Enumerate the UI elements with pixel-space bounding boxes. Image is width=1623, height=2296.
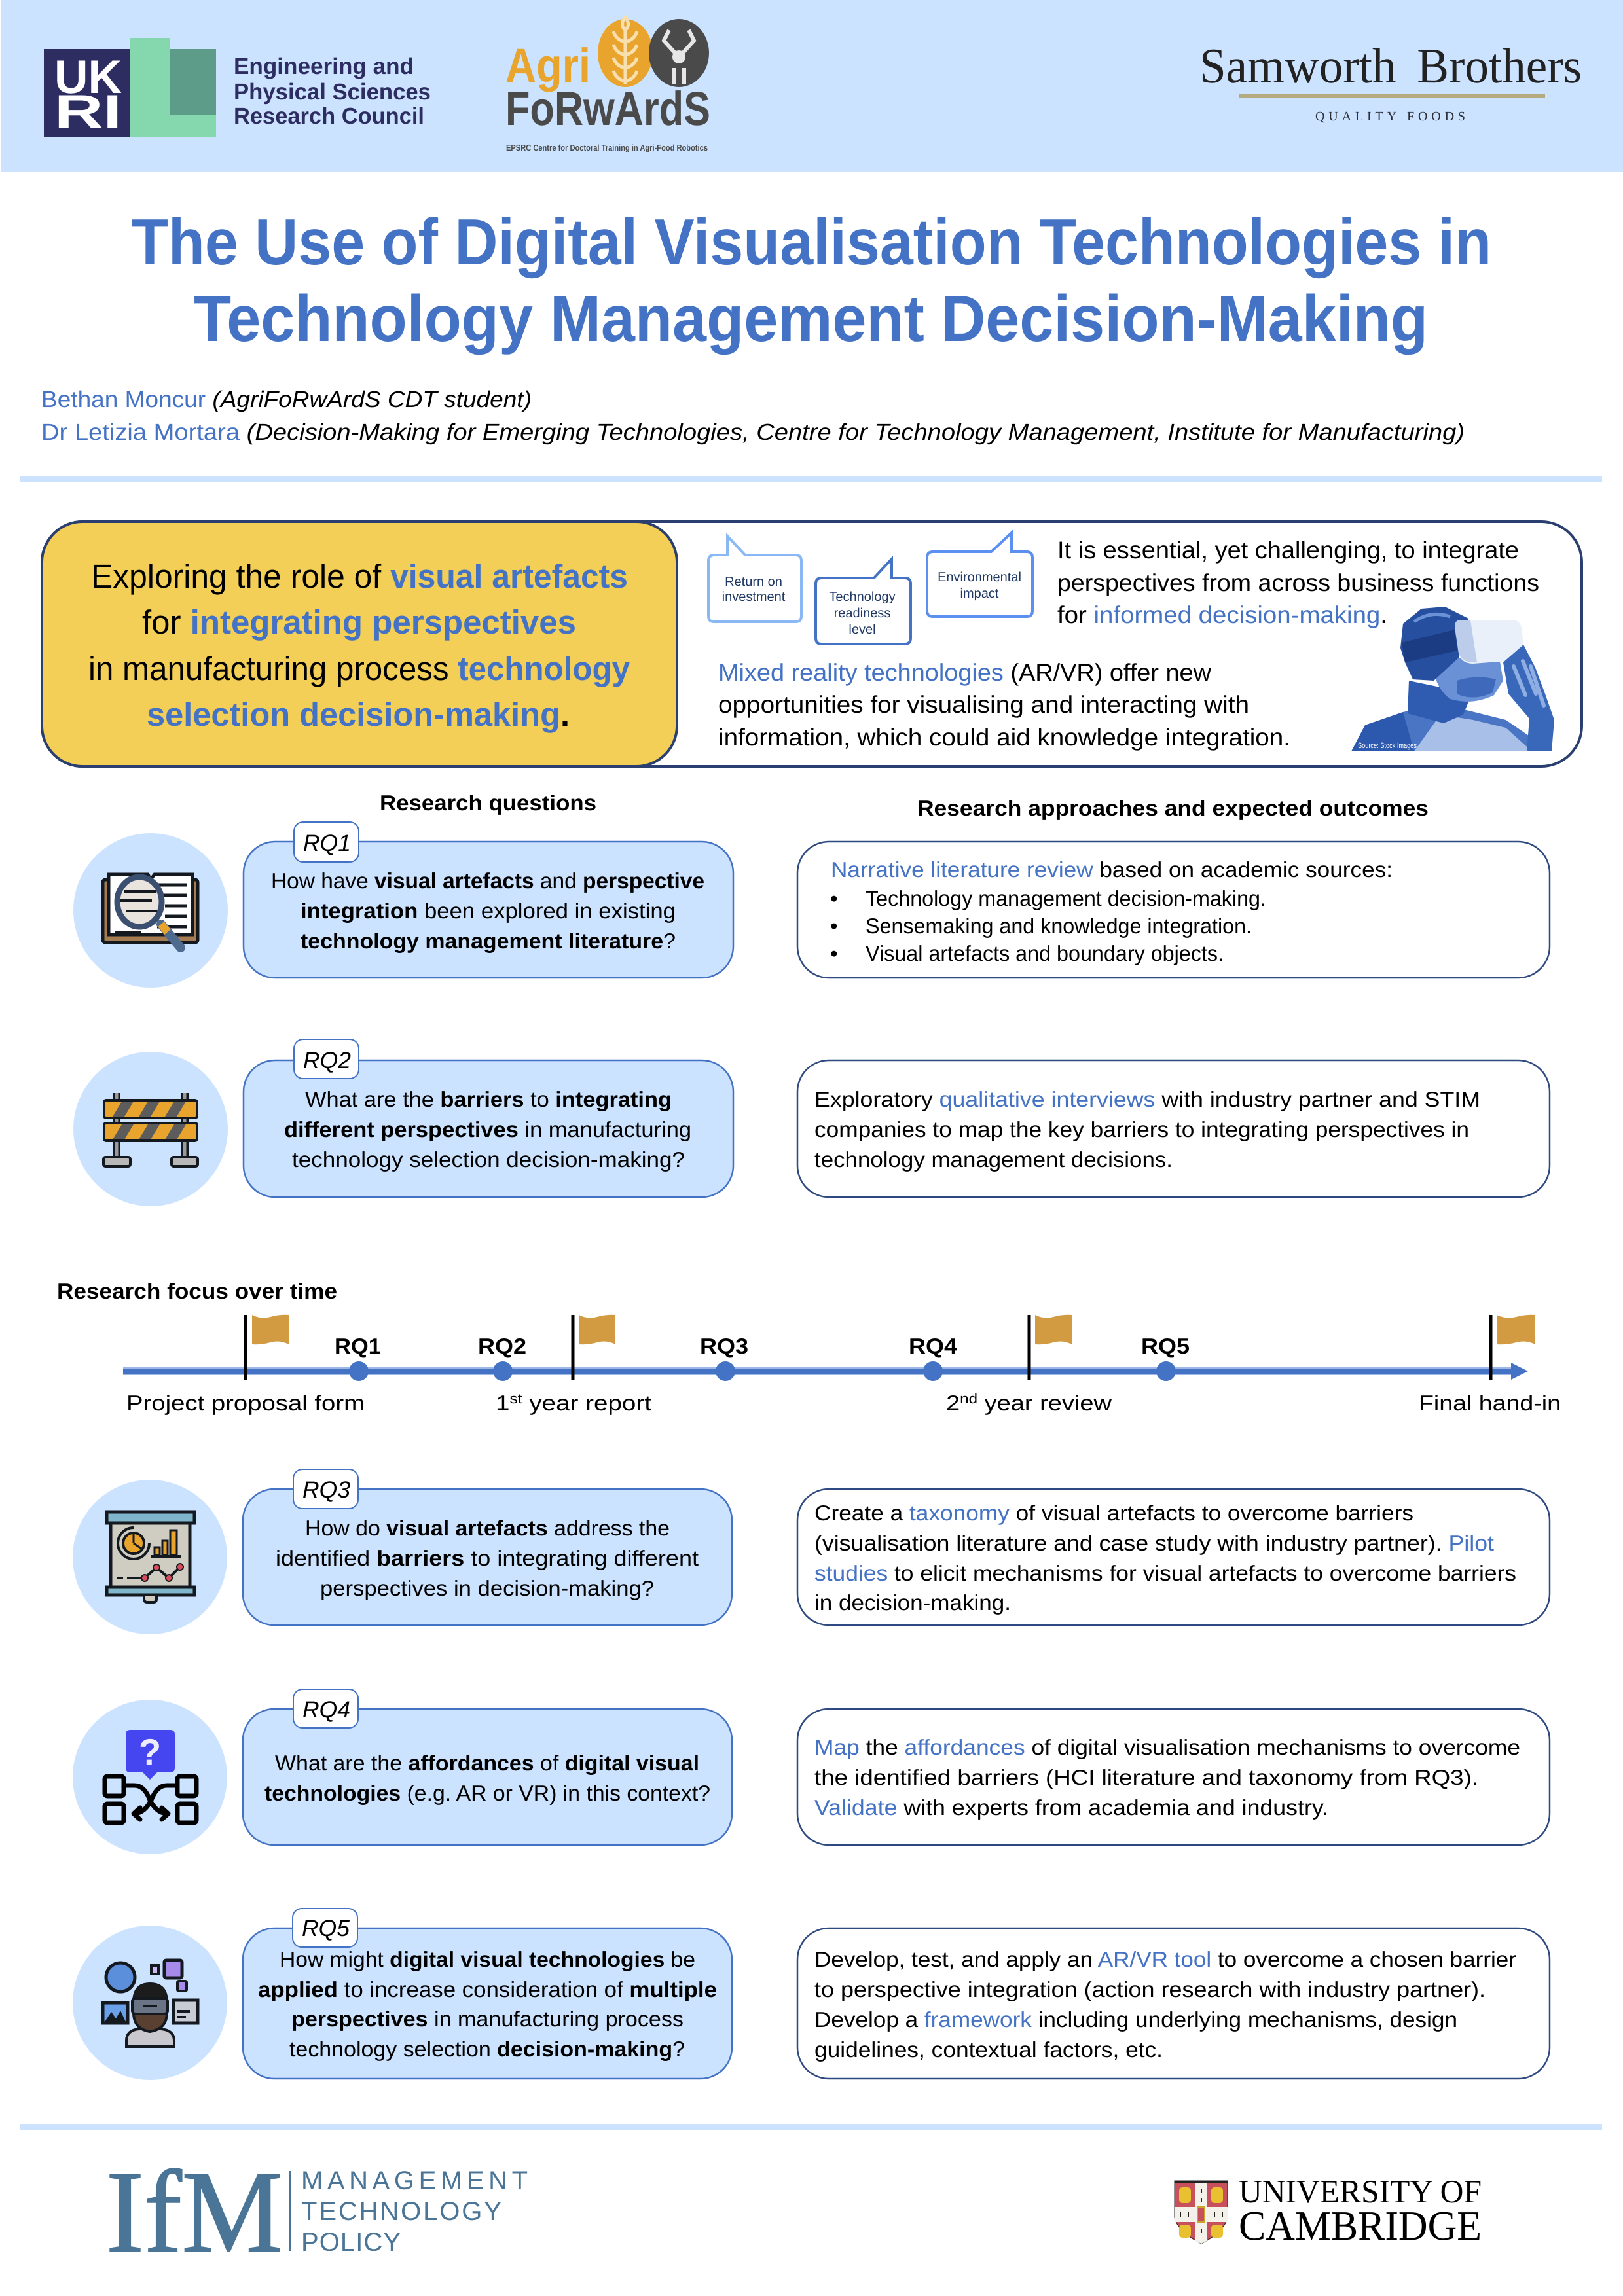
- logo: UKRI: RI: [54, 86, 122, 138]
- logo: Samworth Brothers: [1199, 39, 1582, 124]
- milestone: 1st year report: [496, 1315, 651, 1415]
- speech bubble: technology readiness level: [816, 559, 911, 644]
- approach box RQ1: •: [830, 941, 838, 965]
- headset: [1455, 620, 1524, 664]
- question box RQ1: technology management literature ?: [301, 929, 676, 953]
- tag RQ4: RQ4: [302, 1696, 350, 1723]
- approach box RQ3: Create a taxonomy of visual artefacts to overcome barriers: [814, 1501, 1413, 1525]
- text: integrating perspectives: It is essential, yet challenging, to integrate: [1057, 537, 1519, 564]
- logo: AgriFoRwArdS: Agri: [505, 39, 591, 92]
- logo: EPSRC name: [234, 54, 431, 129]
- icon: presentation chart: [73, 1480, 227, 1634]
- question box RQ2: different perspectives in manufacturing: [284, 1117, 691, 1141]
- panel: aim statement: [42, 522, 677, 766]
- milestone: final hand-in: Final hand-in: [1419, 1391, 1561, 1415]
- question box RQ3: identified barriers to integrating different: [276, 1546, 699, 1570]
- logo: EPSRC name: Engineering and: [234, 54, 414, 79]
- approach box RQ2: [797, 1060, 1550, 1197]
- approach box RQ3: in decision-making.: [814, 1590, 1011, 1615]
- logo: IfM: MANAGEMENT: [301, 2166, 528, 2195]
- hair: [1400, 607, 1468, 681]
- approach box RQ2: companies to map the key barriers to integrating perspectives in: [814, 1117, 1469, 1141]
- logo: EPSRC name: Physical Sciences: [234, 79, 431, 105]
- logo: AgriFoRwArdS: FoRwArdS: [505, 82, 710, 135]
- speech bubble: return on investment: Return on: [725, 575, 782, 589]
- tag RQ3: RQ3: [302, 1477, 350, 1503]
- timeline point RQ3: RQ3: [700, 1334, 748, 1358]
- icon: robot arm: [649, 19, 709, 87]
- title: [132, 206, 1491, 355]
- panel: aim statement: selection decision-making.: [147, 696, 570, 733]
- logo: UKRI: UK: [54, 51, 122, 103]
- logo: IfM: TECHNOLOGY: [301, 2197, 501, 2226]
- question box RQ4: [243, 1689, 732, 1845]
- tag RQ2: RQ2: [303, 1047, 351, 1073]
- text: integrating perspectives: perspectives from across business functions: [1057, 569, 1539, 596]
- timeline point RQ5: [1141, 1334, 1190, 1381]
- approach box RQ3: (visualisation literature and case study with industry partner). Pilot: [814, 1531, 1494, 1555]
- speech bubble: environmental impact: [927, 533, 1032, 617]
- tag RQ4: [293, 1689, 358, 1728]
- approach box RQ5: to perspective integration (action research with industry partner).: [814, 1977, 1486, 2001]
- approach box RQ5: guidelines, contextual factors, etc.: [814, 2037, 1163, 2062]
- text: mixed reality: Mixed reality technologies (AR/VR) offer new: [718, 659, 1211, 686]
- authors: Dr Letizia Mortara (Decision-Making for Emerging Technologies, Centre for Technology Management, Institute for Manufacturing): [41, 420, 1465, 445]
- timeline: [123, 1315, 1561, 1415]
- milestone: 1st year report: year report: [522, 1391, 651, 1415]
- question box RQ3: How do visual artefacts address the: [305, 1516, 670, 1540]
- milestone: project proposal form: Project proposal form: [126, 1391, 365, 1415]
- approach box RQ1: Sensemaking and knowledge integration.: [866, 914, 1252, 938]
- approach box RQ1: •: [830, 914, 838, 938]
- logo: IfM: POLICY: [301, 2228, 401, 2257]
- icon: question and flow: [73, 1700, 227, 1854]
- RQ5 row: [73, 1909, 1550, 2080]
- question box RQ2: [244, 1039, 733, 1197]
- question box RQ1: integration been explored in existing: [301, 899, 676, 923]
- question box RQ1: How have visual artefacts and perspective: [271, 869, 704, 893]
- text: mixed reality: [718, 659, 1290, 751]
- logo: Samworth Brothers: QUALITY FOODS: [1315, 109, 1465, 124]
- timeline point RQ3: [700, 1334, 748, 1381]
- approach box RQ3: studies to elicit mechanisms for visual artefacts to overcome barriers: [814, 1561, 1516, 1585]
- timeline point RQ4: [909, 1334, 958, 1381]
- milestone: 2nd year review: year review: [977, 1391, 1112, 1415]
- tag RQ5: [293, 1909, 357, 1947]
- torso and shirt: [1351, 704, 1552, 751]
- logo: AgriFoRwArdS: EPSRC Centre for Doctoral Training in Agri-Food Robotics: [506, 143, 708, 152]
- neck: [1408, 681, 1472, 723]
- hand and arm: [1503, 645, 1554, 751]
- milestone: project proposal form: [126, 1315, 365, 1415]
- question box RQ5: applied to increase consideration of multiple: [258, 1977, 717, 2001]
- icon: shield: [1175, 2181, 1228, 2244]
- question box RQ4: technologies (e.g. AR or VR) in this context?: [264, 1781, 710, 1805]
- face: [1431, 658, 1503, 702]
- text: integrating perspectives: for informed decision-making .: [1057, 601, 1387, 628]
- timeline point RQ1: [335, 1334, 381, 1381]
- approach box RQ1: Narrative literature review based on academic sources:: [831, 857, 1393, 882]
- approach box RQ3: [797, 1489, 1550, 1625]
- panel: context: [42, 522, 1582, 766]
- approach box RQ1: Technology management decision-making.: [866, 886, 1266, 910]
- milestone: 1st year report: 1: [496, 1391, 507, 1415]
- approach box RQ1: •: [830, 886, 838, 910]
- speech bubble: environmental impact: Environmental: [938, 570, 1021, 584]
- speech bubble: technology readiness level: level: [848, 622, 876, 637]
- logo: Samworth Brothers: Samworth Brothers: [1199, 39, 1582, 94]
- question box RQ1: [244, 822, 733, 978]
- tag RQ1: RQ1: [303, 830, 351, 856]
- question box RQ3: perspectives in decision-making?: [320, 1576, 654, 1600]
- approach box RQ1: Visual artefacts and boundary objects.: [866, 941, 1224, 965]
- logo: AgriFoRwArdS: [505, 17, 710, 152]
- approach box RQ2: technology management decisions.: [814, 1147, 1173, 1172]
- tag RQ1: [294, 822, 359, 862]
- authors: [41, 387, 1465, 445]
- timeline point RQ1: RQ1: [335, 1334, 381, 1358]
- image: person wearing VR headset: [1351, 607, 1554, 751]
- logo: University of Cambridge: UNIVERSITY OF: [1239, 2173, 1482, 2210]
- tag RQ2: [294, 1039, 359, 1079]
- header band: [1, 0, 1623, 172]
- icon: wheat: [598, 17, 653, 87]
- RQ2 row: [73, 1039, 1550, 1206]
- panel: aim statement: for integrating perspectives: [142, 603, 576, 641]
- approach box RQ5: Develop a framework including underlying mechanisms, design: [814, 2007, 1457, 2032]
- speech bubble: return on investment: investment: [722, 590, 786, 604]
- question box RQ3: [243, 1469, 732, 1625]
- timeline point RQ2: [478, 1334, 526, 1381]
- text: mixed reality: opportunities for visualising and interacting with: [718, 691, 1249, 718]
- RQ3 row: [73, 1469, 1550, 1634]
- question box RQ4: What are the affordances of digital visual: [275, 1751, 699, 1775]
- timeline point RQ2: RQ2: [478, 1334, 526, 1358]
- panel: aim statement: Exploring the role of visual artefacts: [91, 558, 628, 595]
- axis arrow: [123, 1363, 1528, 1380]
- logo: EPSRC name: Research Council: [234, 103, 424, 129]
- milestone: 2nd year review: nd: [960, 1391, 977, 1407]
- question box RQ5: perspectives in manufacturing process: [291, 2007, 684, 2031]
- tag RQ3: [293, 1469, 358, 1509]
- approach box RQ2: Exploratory qualitative interviews with industry partner and STIM: [814, 1087, 1480, 1111]
- timeline point RQ5: RQ5: [1141, 1334, 1190, 1358]
- speech bubble: return on investment: [708, 536, 801, 622]
- approach box RQ4: [797, 1709, 1550, 1845]
- panel: aim statement: in manufacturing process technology: [88, 650, 630, 687]
- strap: [1402, 630, 1457, 662]
- authors: Bethan Moncur (AgriFoRwArdS CDT student): [41, 387, 532, 412]
- speech bubble: technology readiness level: Technology: [829, 590, 896, 604]
- question box RQ5: How might digital visual technologies be: [280, 1947, 695, 1971]
- heading: research questions: Research questions: [380, 791, 596, 815]
- heading: research approaches: Research approaches and expected outcomes: [917, 796, 1429, 820]
- timeline point RQ4: RQ4: [909, 1334, 958, 1358]
- tag RQ5: RQ5: [302, 1915, 350, 1941]
- approach box RQ4: Map the affordances of digital visualisation mechanisms to overcome: [814, 1735, 1520, 1759]
- approach box RQ4: Validate with experts from academia and industry.: [814, 1795, 1328, 1820]
- icon: VR user: [73, 1926, 227, 2080]
- milestone: 1st year report: st: [509, 1391, 522, 1407]
- speech bubble: environmental impact: impact: [960, 586, 999, 601]
- RQ1 row: [73, 822, 1550, 988]
- icon: book and magnifier: [73, 833, 228, 988]
- heading: research focus over time: Research focus over time: [57, 1279, 337, 1303]
- logo: UKRI: [44, 38, 216, 138]
- logo: IfM: [106, 2147, 528, 2277]
- RQ4 row: [73, 1689, 1550, 1854]
- logo: University of Cambridge: [1175, 2173, 1482, 2249]
- question box RQ5: [243, 1909, 732, 2079]
- image: person wearing VR headset: Source: Stock Images: [1358, 741, 1417, 750]
- title: The Use of Digital Visualisation Technologies in: [132, 206, 1491, 279]
- question box RQ5: technology selection decision-making?: [289, 2037, 685, 2061]
- approach box RQ5: [797, 1928, 1550, 2079]
- milestone: 2nd year review: [946, 1315, 1112, 1415]
- text: mixed reality: information, which could aid knowledge integration.: [718, 724, 1290, 751]
- icon: road barrier: [73, 1052, 228, 1206]
- title: Technology Management Decision-Making: [194, 282, 1428, 355]
- milestone: final hand-in: [1419, 1315, 1561, 1415]
- text: integrating perspectives: [1057, 537, 1539, 628]
- question box RQ2: technology selection decision-making?: [292, 1147, 685, 1172]
- speech bubble: technology readiness level: readiness: [834, 606, 890, 620]
- question box RQ2: What are the barriers to integrating: [305, 1087, 672, 1111]
- approach box RQ4: the identified barriers (HCI literature and taxonomy from RQ3).: [814, 1765, 1478, 1789]
- approach box RQ5: Develop, test, and apply an AR/VR tool to overcome a chosen barrier: [814, 1947, 1516, 1971]
- logo: IfM: IfM: [106, 2147, 283, 2277]
- logo: University of Cambridge: CAMBRIDGE: [1239, 2202, 1482, 2249]
- icon: question and flow: ?: [139, 1731, 161, 1772]
- approach box RQ1: [797, 842, 1550, 978]
- milestone: 2nd year review: 2: [946, 1391, 958, 1415]
